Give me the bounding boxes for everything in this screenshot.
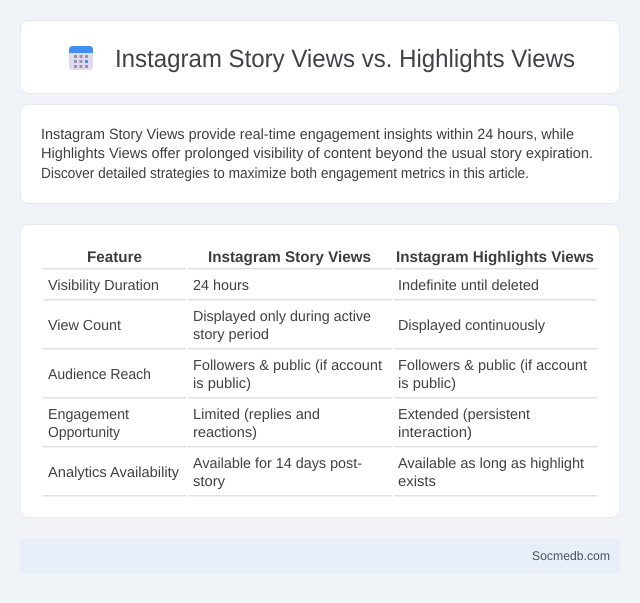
panel: intro text card	[20, 104, 620, 204]
table header row: Instagram Story Views	[208, 249, 371, 266]
row: engagement opportunity: Opportunity	[48, 425, 121, 441]
row: analytics availability	[48, 456, 584, 490]
row: audience reach: Audience Reach	[48, 367, 151, 383]
row: visibility duration: Visibility Duration	[48, 278, 159, 294]
row: view count: Displayed only during active	[193, 309, 371, 325]
row: analytics availability: exists	[398, 474, 436, 490]
row: audience reach: Followers & public (if account	[193, 358, 382, 374]
table header row: Instagram Highlights Views	[396, 249, 594, 266]
row: audience reach	[48, 358, 587, 392]
row: view count: story period	[193, 327, 269, 343]
row: view count: Displayed continuously	[398, 318, 546, 334]
table header row	[87, 249, 594, 266]
intro paragraph	[41, 127, 593, 182]
footer bar	[20, 539, 620, 573]
row: engagement opportunity	[48, 407, 530, 441]
row: visibility duration: Indefinite until deleted	[398, 278, 539, 294]
intro paragraph: Highlights Views offer prolonged visibility of content beyond the usual story expiration.	[41, 146, 593, 162]
title: Instagram Story Views vs. Highlights Views	[115, 45, 575, 73]
icon: calendar	[69, 46, 93, 70]
row: analytics availability: story	[193, 474, 226, 490]
row: audience reach: is public)	[398, 376, 456, 392]
row: analytics availability: Analytics Availability	[48, 465, 180, 481]
row: audience reach: Followers & public (if account	[398, 358, 587, 374]
row: analytics availability: Available as long as highlight	[398, 456, 584, 472]
row: view count: View Count	[48, 318, 121, 334]
row: engagement opportunity: Extended (persistent	[398, 407, 530, 423]
row: view count	[48, 309, 546, 343]
row: engagement opportunity: reactions)	[193, 425, 257, 441]
row: audience reach: is public)	[193, 376, 251, 392]
table header row: Feature	[87, 249, 142, 266]
intro paragraph: Instagram Story Views provide real-time engagement insights within 24 hours, while	[41, 127, 574, 143]
row: visibility duration	[48, 278, 539, 294]
row: engagement opportunity: Limited (replies and	[193, 407, 320, 423]
panel: title card	[20, 20, 620, 94]
row: analytics availability: Available for 14 days post-	[193, 456, 362, 472]
row: engagement opportunity: Engagement	[48, 407, 129, 423]
footer credit: Socmedb.com	[532, 549, 610, 563]
intro paragraph: Discover detailed strategies to maximize both engagement metrics in this article.	[41, 166, 529, 182]
row: visibility duration: 24 hours	[193, 278, 249, 294]
panel: comparison table card	[20, 224, 620, 518]
row: engagement opportunity: interaction)	[398, 425, 472, 441]
